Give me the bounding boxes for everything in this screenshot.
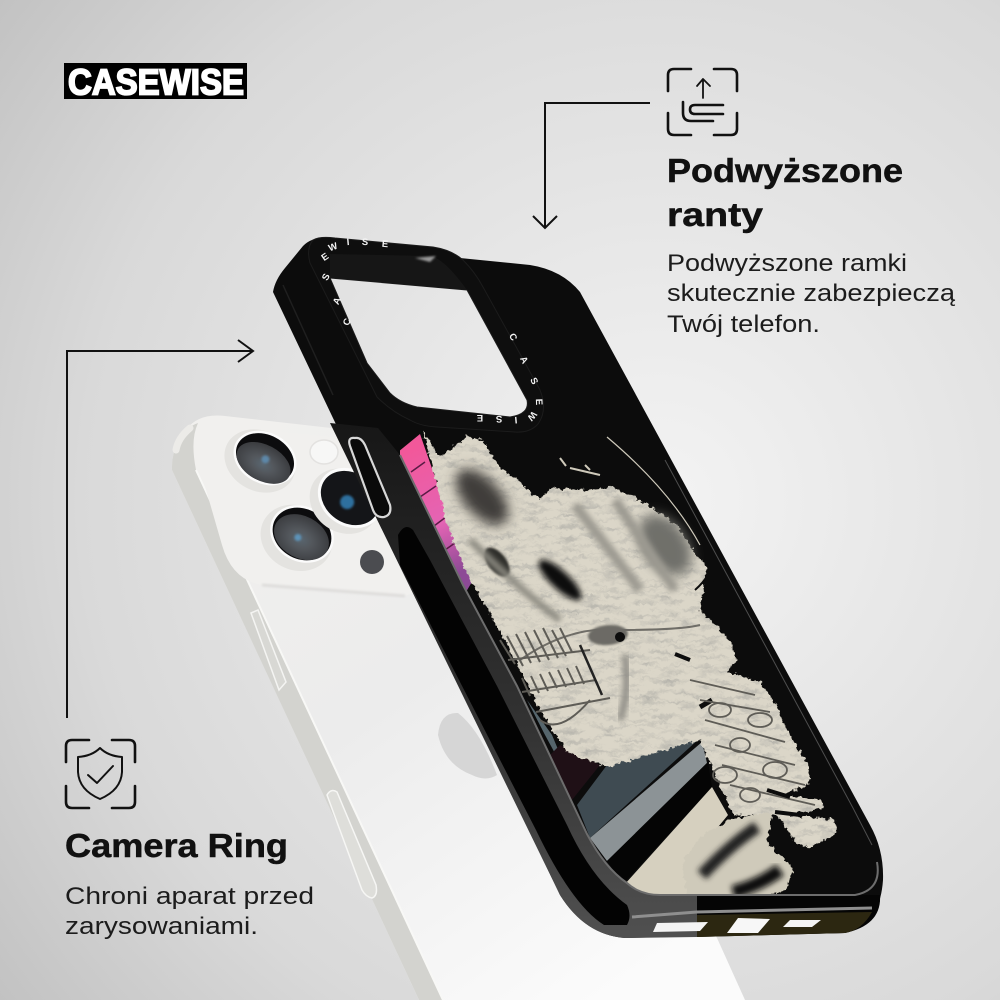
spine [690, 680, 815, 805]
bottom rail [632, 895, 880, 937]
text: raised edges description: skutecznie zabezpieczą [667, 280, 956, 307]
artwork pink panel [398, 434, 476, 592]
arrow: camera ring [67, 340, 253, 718]
lens bottom [249, 491, 345, 584]
ring lettering: E [381, 239, 389, 250]
ring lettering: S [320, 272, 333, 283]
ring lettering [320, 237, 544, 425]
text: camera ring description: zarysowaniami. [65, 913, 258, 940]
ring lettering: W [327, 241, 339, 254]
black case [273, 238, 883, 938]
ring lettering: A [517, 355, 530, 366]
ring lettering: I [514, 414, 518, 425]
upper side gloss [283, 285, 333, 395]
logo: CASEWISE [68, 62, 244, 102]
heading: camera ring: Camera Ring [65, 827, 288, 864]
text: raised edges description [667, 250, 956, 338]
lens right [297, 453, 394, 548]
ring rim [309, 237, 544, 432]
icon: shield [66, 740, 135, 808]
ring lettering: C [506, 332, 519, 343]
phone body [172, 416, 745, 1000]
port right [783, 920, 821, 927]
side button upper [251, 610, 286, 690]
skull form [423, 430, 837, 897]
ring lettering: W [525, 409, 539, 423]
port center [727, 918, 770, 933]
flash [310, 440, 338, 464]
heading: raised edges: Podwyższone [667, 152, 903, 189]
ring lettering: S [496, 413, 502, 424]
phone side rail [172, 423, 443, 1000]
screen rim highlights [400, 455, 878, 895]
ring lettering: C [341, 317, 354, 327]
white phone [172, 416, 745, 1000]
lower lump shading [702, 827, 757, 875]
case artwork: skull [398, 430, 837, 897]
text: camera ring description [65, 883, 314, 940]
skull shading [446, 460, 815, 892]
case shell with camera opening [273, 238, 883, 938]
text: camera ring description: Chroni aparat przed [65, 883, 314, 910]
side button lower [327, 791, 376, 898]
teeth [500, 628, 610, 724]
ring lettering: S [527, 376, 540, 386]
ring lettering: E [533, 399, 544, 405]
lower rail [330, 423, 697, 938]
port left [653, 922, 708, 932]
ring lettering: E [320, 251, 331, 264]
camera ring [309, 237, 544, 432]
text: raised edges description: Twój telefon. [667, 311, 820, 338]
side slot [398, 527, 630, 925]
lens top [213, 417, 307, 505]
arrow: raised edges [533, 103, 650, 228]
sensor [360, 550, 384, 574]
ring lettering: A [331, 296, 344, 307]
phone logo [438, 713, 497, 778]
ring lettering: S [361, 237, 369, 248]
ring inner wall [330, 254, 467, 290]
text: raised edges description: Podwyższone ramki [667, 250, 907, 277]
side button [349, 438, 390, 517]
ring lettering: I [346, 237, 350, 248]
ring lettering: E [477, 412, 483, 423]
heading: raised edges line 2: ranty [667, 196, 764, 233]
artwork stripes [527, 700, 728, 897]
icon: raised edges [668, 69, 737, 135]
artwork brush marks [559, 436, 706, 591]
camera plateau [198, 424, 420, 596]
